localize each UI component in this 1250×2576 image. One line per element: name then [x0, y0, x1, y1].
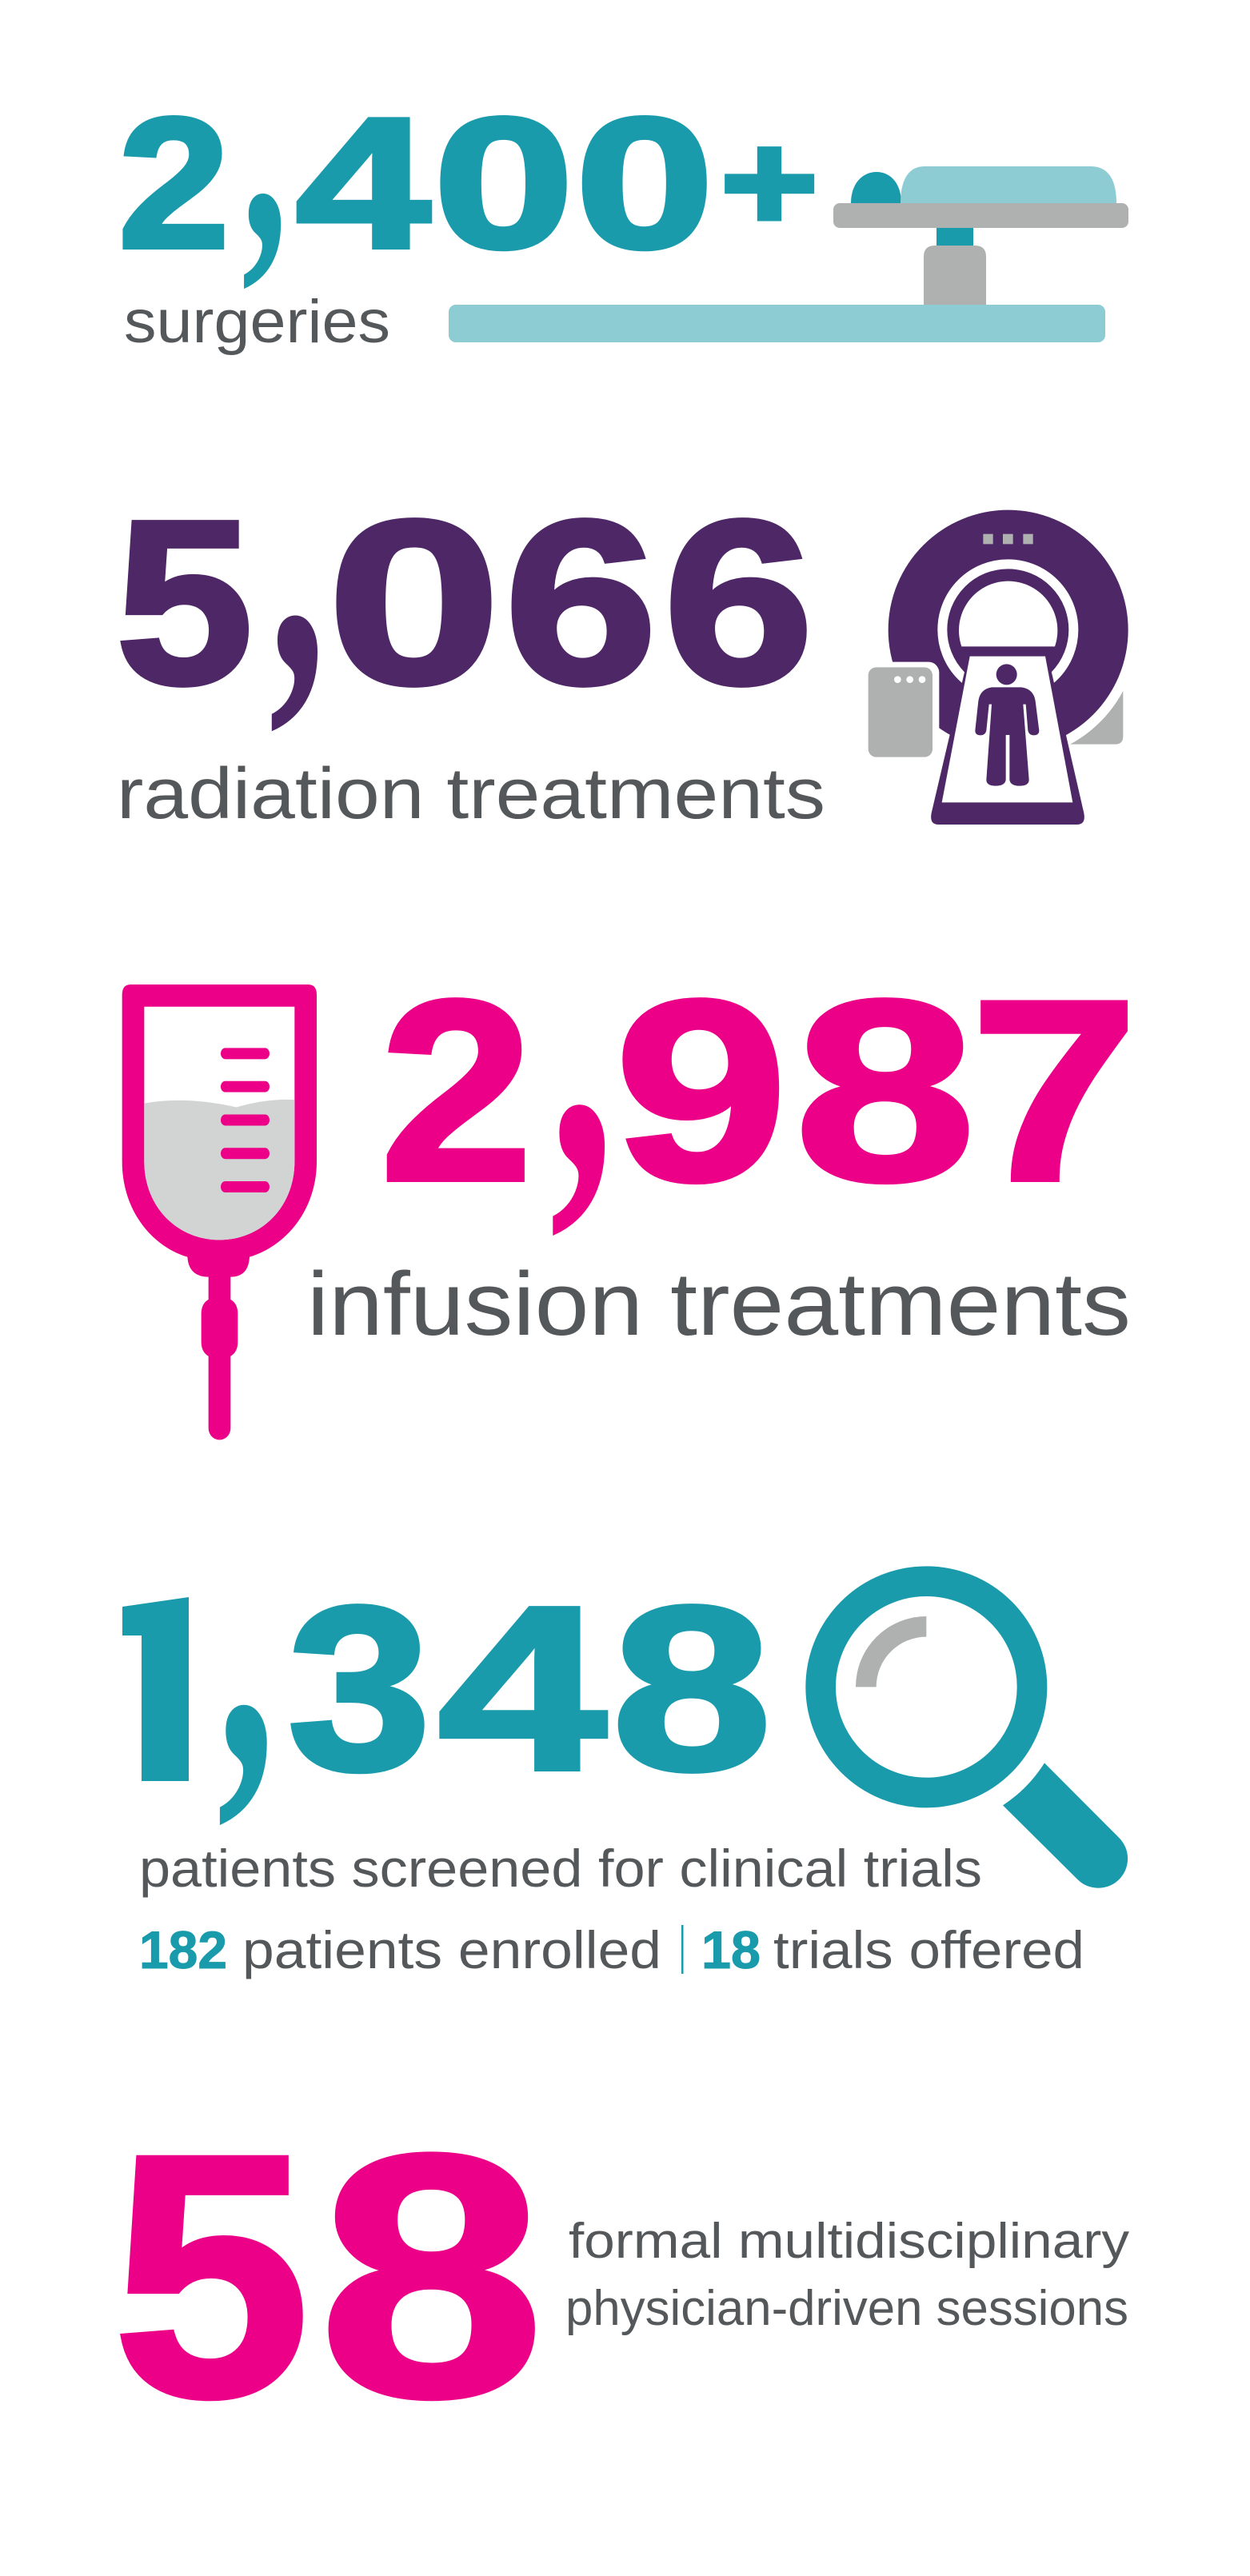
number: 2,400+: 2: [118, 80, 230, 287]
number: 5,066: [115, 329, 814, 755]
number: 58: 8: [318, 2083, 545, 2469]
number: 5,066: 6: [664, 472, 814, 733]
panel: multidisciplinary sessions: [112, 2083, 1129, 2469]
infographic canvas: [120, 115, 1129, 2401]
label: patients screened: patients screened for clinical trials: [139, 1839, 982, 1898]
icon: IV bag: [122, 984, 317, 1440]
line: enrolment and trials: trials offered: [773, 1920, 1084, 1979]
number: 2,987: 8: [795, 948, 976, 1235]
label: radiation treatments: radiation treatments: [117, 754, 825, 834]
number: 2,987: 9: [614, 948, 788, 1235]
number: 5,066: 5: [115, 472, 253, 733]
number: 1,348: 4: [438, 1558, 609, 1819]
number: 1,348: 3: [288, 1558, 431, 1819]
number: 1,348: 8: [612, 1558, 772, 1819]
icon: magnifying glass: [821, 1581, 1128, 1888]
label: formal multidisciplinary: formal multidisciplinary: [569, 2214, 1129, 2269]
icon: surgical table: [449, 166, 1128, 342]
number: 2,400+: +: [721, 106, 818, 259]
number: 2,987: 2: [380, 948, 533, 1235]
number: 2,400+: 4: [296, 80, 430, 287]
line: enrolment and trials: 18: [701, 1920, 761, 1979]
line: enrolment and trials: 182: [139, 1920, 227, 1979]
panel: radiation treatments: [115, 329, 1138, 834]
number: 5,066: 0: [327, 472, 501, 733]
number: 2,987: 7: [971, 948, 1138, 1235]
number: 2,987: ,: [549, 782, 614, 1263]
number: 1,348: [122, 1597, 766, 1825]
number: 2,400+: 0: [576, 80, 713, 287]
number: 2,987: [380, 782, 1138, 1263]
number: 1,348: ,: [217, 1408, 276, 1850]
line: enrolment and trials: [139, 1920, 1084, 1979]
number: 1,348: 1: [66, 1572, 255, 1832]
label: surgeries: surgeries: [124, 288, 390, 356]
panel: clinical trials: [122, 1566, 1128, 1979]
number: 5,066: ,: [269, 329, 326, 755]
icon: MRI scanner: [853, 500, 1138, 825]
line: enrolment and trials: patients enrolled: [242, 1920, 661, 1979]
panel: infusion treatments: [122, 782, 1138, 1440]
number: 5,066: 6: [504, 472, 657, 733]
panel: surgeries: [118, 0, 1128, 356]
number: 2,400+: [118, 0, 818, 309]
label: physician-driven sessions: physician-driven sessions: [565, 2281, 1128, 2336]
number: 58: [112, 2083, 545, 2469]
number: 58: 5: [112, 2083, 310, 2469]
number: 2,400+: 0: [433, 80, 574, 287]
label: infusion treatments: infusion treatments: [307, 1254, 1131, 1354]
